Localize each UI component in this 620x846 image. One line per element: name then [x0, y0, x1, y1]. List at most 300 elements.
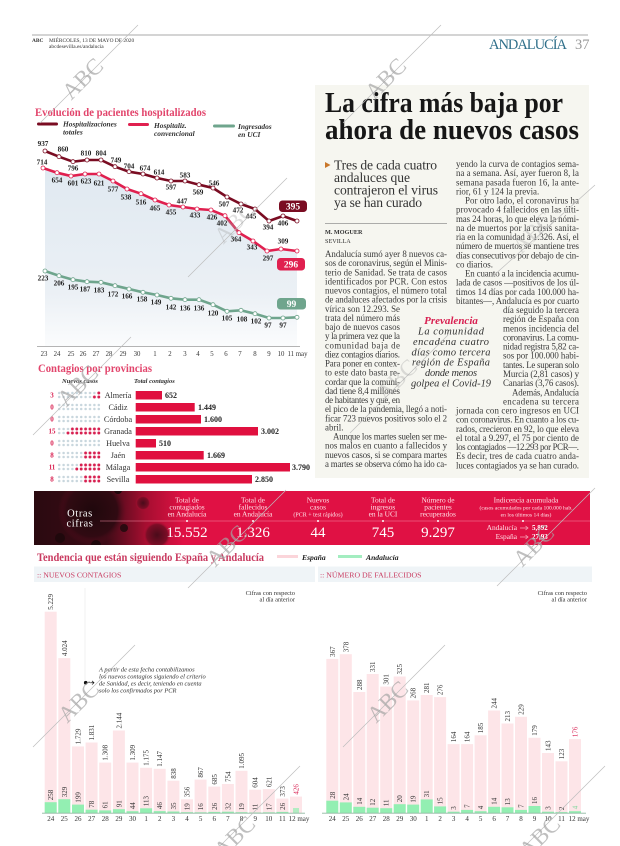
values: España: 1.175	[143, 750, 151, 766]
stat: total fallecidos: 1.326	[236, 525, 270, 541]
total contagion values: 1.669	[207, 451, 225, 460]
article text: left column: abril.	[325, 422, 343, 432]
values: Andalucía: 26	[211, 802, 219, 810]
section bar: número de fallecidos: :: NÚMERO DE FALLECIDOS	[320, 570, 421, 580]
stat: total contagiados: contagiados	[169, 502, 205, 512]
legend: line chart: Hospitaliz.	[153, 121, 187, 130]
new cases numbers: 3	[50, 392, 54, 400]
article text: right column: provocado 4 fallecidos en las últi-	[456, 205, 579, 215]
article text: left column: de andaluces afectados por la crisis	[325, 295, 448, 305]
values: Andalucía: 199	[74, 792, 82, 803]
date labels: 12 may	[569, 815, 590, 823]
series: ICU admissions: 149	[151, 298, 162, 306]
values: Andalucía: 4	[572, 805, 580, 809]
page header: MIÉRCOLES, 13 DE MAYO DE 2020	[49, 36, 134, 44]
series: total hospitalisations: 445	[246, 212, 257, 220]
legend: line chart: Hospitalizaciones	[62, 120, 117, 128]
series: total hospitalisations: 569	[193, 188, 204, 196]
values: España: 1.095	[238, 753, 246, 769]
stat: incidencia acumulada: Indicencia acumulada	[494, 496, 559, 504]
watermarks: ABC: ABC	[508, 520, 559, 571]
series: ICU admissions: 142	[166, 304, 177, 312]
note: compared to previous day (right): al día anterior	[552, 596, 588, 604]
date labels: 8	[240, 815, 244, 823]
date labels: 29	[396, 815, 404, 823]
article text: left column: nos malos en cuanto a fallecidos y	[325, 441, 448, 451]
series: ICU admissions: 187	[80, 286, 91, 294]
date axis labels: 30	[134, 351, 141, 358]
stat: total fallecidos: Total de	[241, 496, 266, 504]
stat: incidencia acumulada: Andalucía	[487, 523, 518, 532]
legend: trend	[277, 553, 399, 562]
series: ICU admissions: 102	[251, 318, 262, 326]
article text: left column: to este dato basta re-	[325, 368, 400, 378]
headline: La cifra más baja por	[325, 87, 563, 119]
article text: right column: yendo la curva de contagios sema-	[456, 159, 579, 169]
province names: Almería	[105, 391, 132, 400]
series: total hospitalisations: 810	[81, 150, 92, 158]
article text: right column: encadena su tercera	[503, 396, 579, 406]
new cases numbers: 0	[50, 440, 54, 448]
date labels: 9	[253, 815, 257, 823]
date axis labels: 27	[93, 351, 100, 358]
article text: left column: ficar 723 nuevos positivos solo el 2	[325, 413, 447, 423]
stat: total fallecidos: fallecidos	[239, 502, 267, 512]
article text: left column: terio de Sanidad. Se trata de casos	[325, 267, 448, 277]
date labels	[47, 815, 310, 823]
series: total hospitalisations	[38, 140, 299, 232]
province names: Málaga	[106, 463, 131, 472]
date labels: 25	[61, 815, 68, 823]
stat: total contagiados: 15.552	[166, 525, 208, 541]
page header: abcdesevilla.es/andalucia	[49, 44, 104, 50]
watermarks: ABC: ABC	[371, 354, 422, 405]
values: Andalucía: 19	[184, 803, 192, 810]
series: total hospitalisations: 860	[58, 146, 69, 154]
series: ICU admissions: 120	[208, 310, 219, 318]
total contagion values: 1.449	[198, 403, 216, 412]
values: Andalucía	[47, 786, 287, 810]
label: otras cifras: cifras	[67, 518, 93, 530]
date labels: 30	[410, 815, 417, 823]
article text: right column: Por otro lado, el coronavirus ha	[465, 196, 579, 206]
panel: otras cifras band	[34, 491, 590, 545]
article text: right column: el total a 9.297, el 75 por ciento de	[456, 433, 579, 443]
stat: incidencia acumulada	[479, 496, 573, 541]
series: conventional hospitalisation: 402	[217, 220, 228, 228]
series: conventional hospitalisation: 516	[136, 198, 147, 206]
heading: trend: Tendencia que están siguiendo España y Andalucía	[37, 552, 264, 564]
province names: Huelva	[106, 439, 130, 448]
article text: right column: rior, 61 y 124 la previa.	[456, 186, 539, 196]
stat: ingresos UCI: ingresos	[371, 502, 395, 512]
total contagion values: 510	[159, 439, 171, 448]
callout: Prevalencia: golpea el Covid-19	[411, 378, 492, 389]
stat: ingresos UCI	[369, 496, 398, 541]
subheading with arrow: Tres de cada cuatro	[334, 158, 437, 172]
new cases dot grids	[57, 391, 101, 483]
article text: left column	[325, 249, 448, 469]
stat: total fallecidos: en Andalucía	[234, 510, 273, 518]
values: España: 268	[410, 687, 418, 698]
panel: article background	[315, 85, 589, 478]
date axis labels: 10	[278, 351, 285, 358]
date axis labels: 26	[80, 351, 87, 358]
province names: Jaén	[111, 451, 125, 460]
series: conventional hospitalisation: 433	[190, 212, 201, 220]
byline	[325, 223, 447, 245]
stat: incidencia acumulada: en los últimos 14 días)	[501, 512, 551, 518]
watermarks: ABC: ABC	[201, 520, 252, 571]
date labels: 4	[185, 815, 189, 823]
section bar: nuevos contagios: :: NUEVOS CONTAGIOS	[37, 570, 121, 580]
values: España: 1.729	[74, 728, 82, 744]
stat: incidencia acumulada: 5,892	[532, 524, 548, 532]
callout: Prevalencia	[411, 315, 492, 389]
stat: incidencia acumulada: España	[496, 532, 518, 541]
callout: Prevalencia: días como tercera	[412, 347, 490, 358]
values: España: 838	[170, 768, 178, 779]
date axis labels: 1	[153, 351, 157, 358]
article text: right column: día seguido la tercera	[503, 305, 579, 315]
total contagion values: 2.850	[255, 475, 273, 484]
date labels: 8	[519, 815, 523, 823]
date labels: 27	[88, 815, 96, 823]
province names	[104, 391, 132, 484]
values: España: 1.309	[129, 744, 137, 761]
stat: ingresos UCI: en la UCI	[369, 510, 398, 518]
article text: right column: na de muertos por la crisis sanita-	[456, 223, 579, 233]
byline: M. MOGUER	[325, 229, 363, 236]
new cases numbers: 15	[48, 428, 56, 436]
article text: right column: tantes. Le superan solo	[503, 360, 580, 370]
stat: incidencia acumulada: 27,93	[532, 533, 548, 541]
legend: trend: Andalucía	[365, 553, 399, 562]
bars: Andalucía	[326, 799, 581, 813]
series: conventional hospitalisation	[37, 158, 299, 262]
article text: left column: nuevos contagios, el número total	[325, 286, 448, 296]
values: España: 288	[356, 679, 364, 690]
article text: right column: timos 14 días por cada 100.000 ha-	[456, 287, 579, 297]
date labels: 7	[506, 815, 510, 823]
date labels: 6	[213, 815, 217, 823]
series: conventional hospitalisation: 465	[150, 204, 161, 212]
date labels: 1	[425, 815, 429, 823]
values: España: 176	[572, 726, 580, 737]
series: conventional hospitalisation: 447	[177, 198, 188, 206]
values: España: 356	[184, 786, 192, 797]
article text: right column: número de muertos se mantiene tres	[456, 241, 580, 251]
series: conventional hospitalisation: 623	[81, 178, 92, 186]
callout: Prevalencia: La comunidad	[417, 326, 485, 338]
stat: recuperados: recuperados	[420, 510, 456, 518]
values: Andalucía: 46	[156, 802, 164, 809]
date labels: 29	[115, 815, 123, 823]
series: conventional hospitalisation: 538	[121, 194, 132, 202]
values: Andalucía: 2	[558, 806, 566, 810]
page header: 37	[575, 37, 590, 53]
series: ICU admissions: 206	[54, 280, 65, 288]
date axis labels: 3	[183, 351, 187, 358]
values: Andalucía: 31	[423, 790, 431, 797]
values: España: 185	[477, 722, 485, 733]
article text: left column: identificados por PCR. Con estos	[325, 276, 448, 286]
article text: right column: bitantes—, Andalucía es por cuarto	[456, 296, 580, 306]
series: ICU admissions: 195	[68, 284, 79, 292]
article text: right column: jornada con cero ingresos en UCI	[455, 406, 579, 416]
stat: nuevos casos: casos	[310, 502, 326, 512]
stat: ingresos UCI: 745	[372, 525, 394, 541]
date axis labels: 28	[106, 351, 113, 358]
date axis labels: 25	[68, 351, 75, 358]
new cases numbers: 8	[50, 476, 54, 484]
date axis labels	[41, 351, 308, 358]
date labels: 5	[479, 815, 483, 823]
callout: Prevalencia: encadena cuatro	[413, 337, 489, 348]
values: España: 621	[265, 776, 273, 787]
series: ICU admissions: 172	[108, 290, 119, 298]
series: total hospitalisations: 546	[209, 180, 220, 188]
date axis labels: 23	[41, 351, 48, 358]
date axis labels: 9	[267, 351, 271, 358]
series: total hospitalisations: 507	[219, 200, 230, 208]
values: España: 213	[504, 710, 512, 722]
series: conventional hospitalisation: 297	[263, 254, 274, 262]
article text: right column: días consecutivos por debajo de cin-	[456, 250, 579, 260]
date labels: 28	[102, 815, 109, 823]
values: Andalucía: 35	[170, 802, 178, 810]
end value: total 395: 395	[286, 202, 300, 212]
article text: right column: con coronavirus. En cuanto a los cu-	[456, 415, 579, 425]
values: España: 367	[329, 646, 337, 657]
date labels	[329, 815, 590, 823]
values: España: 754	[224, 771, 232, 782]
stat: incidencia acumulada: (casos acumulados por cada 100.000 hab.	[479, 504, 573, 512]
new cases numbers: 0	[50, 404, 54, 412]
series: ICU admissions: 136	[180, 304, 191, 312]
article text: right column: rados, crecieron en 92, lo que eleva	[456, 424, 579, 434]
values: Andalucía: 258	[47, 789, 55, 800]
values: España: 164	[450, 731, 458, 742]
total contagion bars	[136, 391, 290, 484]
series: ICU admissions: 158	[137, 296, 148, 304]
date axis labels: 5	[210, 351, 214, 358]
article text: right column: Murcia (2,81 casos) y	[503, 369, 580, 379]
values: España: 604	[252, 777, 260, 788]
series: total hospitalisations: 472	[233, 206, 244, 214]
date labels: 6	[492, 815, 496, 823]
values: Andalucía: 11	[383, 799, 391, 806]
watermarks: ABC: ABC	[360, 53, 411, 104]
column headers: provinces: Total contagios	[134, 378, 175, 385]
values: Andalucía: 78	[88, 800, 96, 808]
subheading with arrow: andaluces que	[334, 170, 410, 185]
bars: España	[326, 654, 581, 813]
values: Andalucía: 14	[491, 797, 499, 805]
article text: left column: bajo de nuevos casos	[325, 322, 401, 332]
date labels: 9	[533, 815, 537, 823]
values: España: 378	[342, 641, 350, 652]
article text: right column: na a semana. Así, ayer fueron 8, la	[456, 168, 579, 178]
values: Andalucía: 44	[129, 802, 137, 809]
total contagion values	[159, 391, 310, 484]
date axis labels: 2	[168, 351, 172, 358]
watermarks: ABC: ABC	[507, 207, 558, 258]
article text: left column: Aunque los martes suelen ser me-	[333, 432, 447, 442]
values: España: 685	[211, 774, 219, 785]
date axis labels: 11 may	[288, 351, 308, 358]
article text: right column: mas 24 horas, lo que eleva la nómi-	[456, 214, 579, 224]
stat: recuperados	[420, 496, 456, 541]
heading: provinces: Contagios por provincias	[38, 363, 153, 375]
page header: ABC	[32, 38, 43, 44]
stat: total contagiados: Total de	[175, 496, 200, 504]
values: España: 301	[383, 674, 391, 685]
values: Andalucía: 32	[224, 802, 232, 810]
article text: left column: cordar que la comuni-	[325, 377, 400, 387]
note: compared to previous day (left): al día anterior	[260, 596, 296, 604]
date labels: 7	[226, 815, 230, 823]
bars: Andalucía	[45, 799, 299, 813]
series: conventional hospitalisation: 654	[52, 176, 63, 184]
bars: España	[45, 612, 302, 813]
date labels: 10	[544, 815, 552, 823]
values: Andalucía: 3	[450, 806, 458, 810]
line chart: hospitalised patients	[37, 140, 308, 358]
subheading with arrow: ya se han curado	[334, 195, 422, 210]
series: conventional hospitalisation: 455	[166, 208, 177, 216]
article text: left column: de habitantes y que, en	[325, 395, 401, 405]
bar chart: número de fallecidos	[322, 641, 590, 823]
stat: nuevos casos: 44	[310, 525, 326, 541]
callout: Prevalencia: donde menos	[425, 368, 477, 379]
values: España: 244	[491, 698, 499, 708]
date labels: 24	[329, 815, 336, 823]
series: ICU admissions: 105	[222, 314, 233, 322]
series: ICU admissions: 97	[279, 322, 287, 330]
annotation: PCR criterion: solo los confirmados por PCR	[99, 688, 176, 694]
article text: right column: lada de casos —positivos de los úl-	[456, 278, 579, 288]
values: España: 426	[292, 784, 300, 795]
stat: ingresos UCI: Total de	[371, 496, 396, 504]
province names: Cádiz	[108, 403, 128, 412]
date labels: 4	[465, 815, 469, 823]
values: España: 281	[423, 682, 431, 693]
series: total hospitalisations: 674	[140, 164, 151, 172]
series: ICU admissions: 97	[264, 322, 272, 330]
new cases numbers	[48, 392, 56, 484]
end value: ICU 99: 99	[287, 300, 296, 310]
date labels: 11	[279, 815, 286, 823]
series: conventional hospitalisation: 577	[108, 186, 119, 194]
page header: ANDALUCÍA	[489, 36, 568, 53]
article text: right column: los contagiados —12.293 por PCR—.	[456, 442, 579, 452]
date labels: 26	[356, 815, 363, 823]
watermarks: ABC: ABC	[52, 360, 103, 411]
article text: right column: menos incidencia del	[503, 323, 580, 333]
values: España: 1.308	[102, 744, 110, 761]
article text: right column: Es decir, tres de cada cuatro anda-	[456, 451, 579, 461]
article text: right column: co diarios.	[456, 259, 493, 269]
date labels: 2	[158, 815, 162, 823]
legend: line chart: totales	[63, 128, 83, 136]
new cases numbers: 11	[49, 464, 56, 472]
date axis labels: 6	[224, 351, 228, 358]
article text: left column: Andalucía sumó ayer 8 nuevos ca-	[325, 249, 447, 259]
values: España: 2.144	[115, 712, 123, 728]
article text: right column: sos por 100.000 habi-	[503, 351, 579, 361]
total contagion values: 652	[165, 391, 177, 400]
series: conventional hospitalisation: 364	[231, 236, 242, 244]
province names: Granada	[104, 427, 132, 436]
values: Andalucía: 3	[544, 806, 552, 810]
new cases numbers: 0	[50, 416, 54, 424]
values: España: 325	[396, 664, 404, 674]
stat: total fallecidos	[234, 496, 273, 541]
bar chart: nuevos contagios	[42, 588, 310, 823]
date labels: 28	[383, 815, 390, 823]
article text: right column	[455, 159, 580, 470]
values: Andalucía: 16	[197, 803, 205, 810]
legend: line chart: convencional	[154, 129, 196, 138]
total contagion values: 3.790	[292, 463, 310, 472]
article text: left column: trata del número más	[325, 313, 401, 323]
section bar: nuevos contagios	[34, 566, 315, 582]
date axis labels: 29	[120, 351, 127, 358]
annotation: PCR criterion	[84, 666, 206, 694]
values: Andalucía: 91	[115, 800, 123, 807]
byline: SEVILLA	[325, 238, 351, 245]
date axis labels: 8	[253, 351, 257, 358]
series: ICU admissions: 223	[38, 274, 49, 282]
values: Andalucía: 61	[102, 801, 110, 808]
province table	[48, 391, 310, 484]
icon: virus illustration	[55, 491, 170, 545]
values: España: 123	[558, 748, 566, 759]
total contagion values: 1.600	[204, 415, 222, 424]
series: total hospitalisations: 394	[263, 224, 274, 232]
values: Andalucía: 15	[437, 797, 445, 804]
series: total hospitalisations: 937	[38, 140, 49, 148]
article text: left column: Para poner en contex-	[325, 359, 400, 369]
article text: right column: coronavirus. La comu-	[503, 332, 579, 342]
stat: nuevos casos: (PCR + test rápidos)	[293, 512, 343, 518]
values: España: 143	[544, 740, 552, 751]
series: total hospitalisations: 583	[180, 172, 191, 180]
stat: nuevos casos	[293, 496, 343, 541]
watermarks: ABC: ABC	[209, 197, 260, 248]
heading: hospitalised patients: Evolución de pacientes hospitalizados	[35, 107, 207, 119]
column headers: provinces	[61, 378, 175, 385]
values: España	[329, 641, 580, 759]
article text: left column: diez contagios diarios.	[325, 349, 400, 359]
series: total hospitalisations: 597	[166, 184, 177, 192]
date labels: 11	[558, 815, 565, 823]
legend: line chart	[37, 120, 272, 139]
label: otras cifras: Otras	[67, 508, 93, 520]
note: compared to previous day (left)	[246, 590, 296, 604]
date labels: 12 may	[289, 815, 310, 823]
values: Andalucía: 28	[329, 791, 337, 799]
values: Andalucía: 4	[477, 805, 485, 809]
series: total hospitalisations: 614	[154, 168, 165, 176]
values: Andalucía: 11	[252, 803, 260, 810]
values: Andalucía: 24	[342, 793, 350, 800]
section bar: número de fallecidos	[318, 566, 592, 582]
values: España: 229	[518, 704, 526, 715]
series: conventional hospitalisation: 343	[247, 244, 258, 252]
headline	[325, 87, 579, 146]
